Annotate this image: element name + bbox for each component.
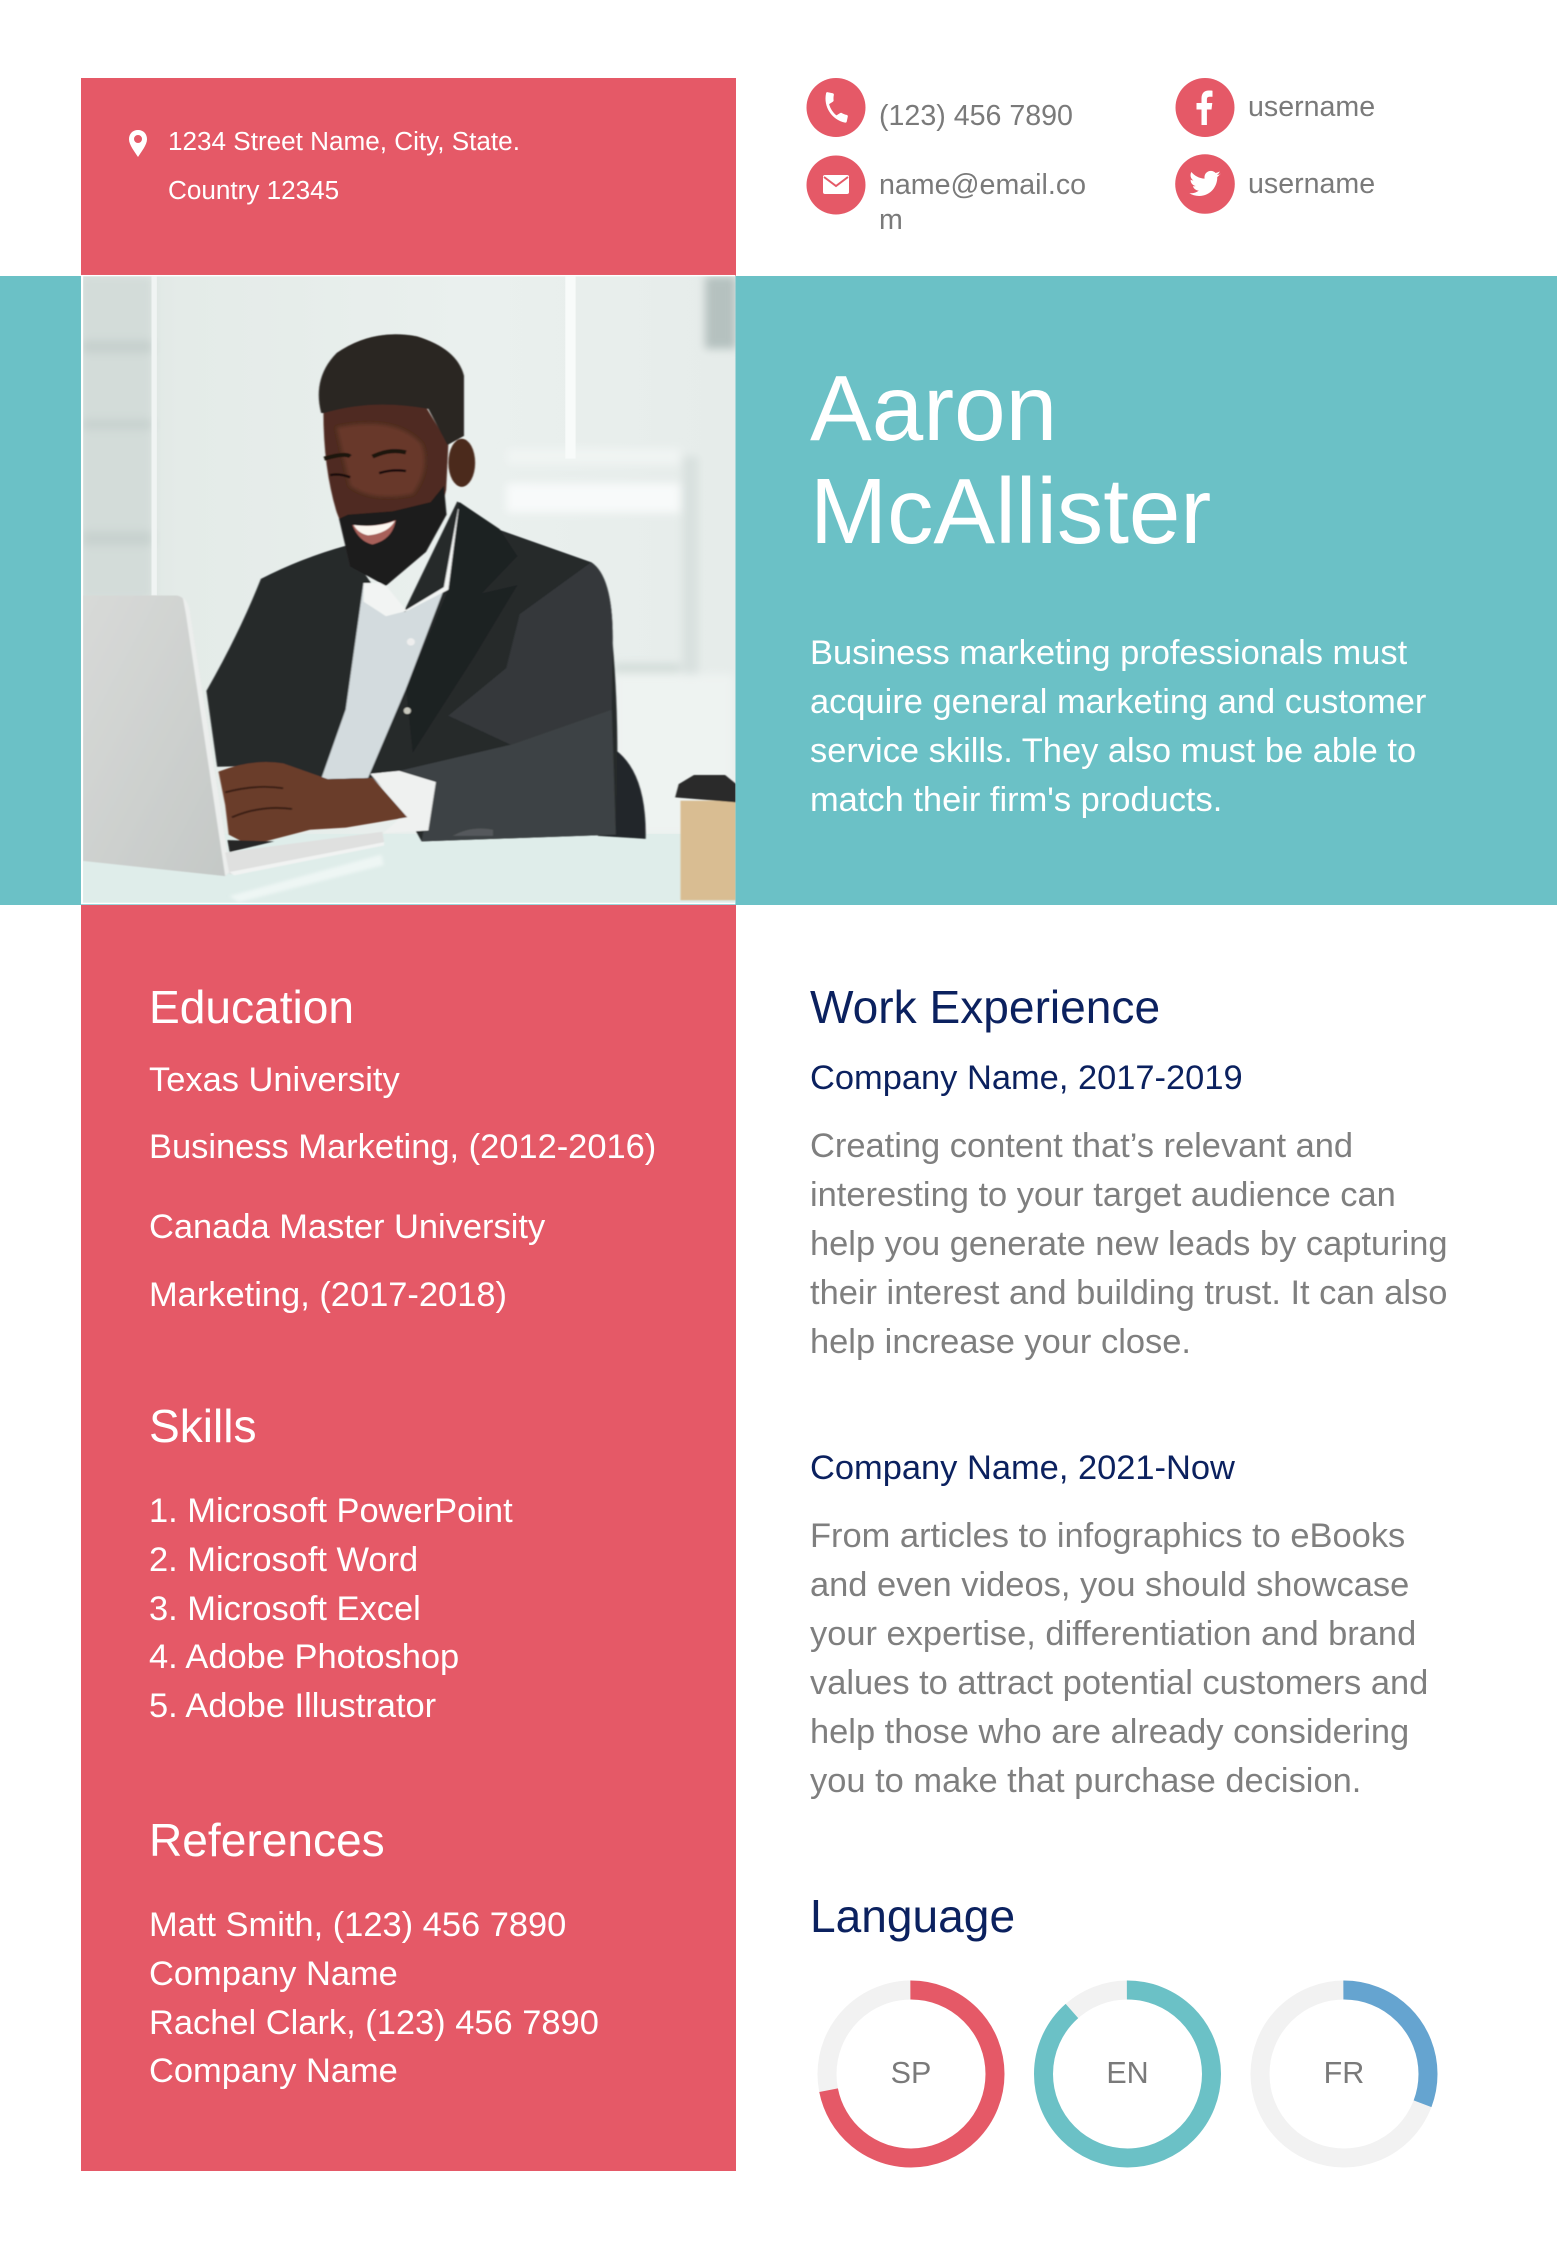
summary text: Business marketing professionals must (810, 634, 1407, 672)
heading: skills: Skills (149, 1400, 257, 1452)
hair (319, 334, 464, 445)
laptop base (225, 832, 384, 874)
mouth (352, 520, 396, 544)
donut: EN: EN (1106, 2056, 1149, 2090)
job description 2: and even videos, you should showcase (810, 1566, 1409, 1604)
heading: language: Language (810, 1890, 1015, 1942)
references list: Matt Smith, (123) 456 7890 (149, 1906, 566, 1944)
hand (218, 762, 407, 845)
address text: Country 12345 (168, 175, 339, 205)
education entries: Canada Master University (149, 1208, 545, 1246)
icon: facebook (1176, 78, 1234, 137)
heading: education: Education (149, 980, 354, 1032)
panel: teal hero band (0, 276, 1557, 905)
summary text (810, 634, 1426, 818)
beard (339, 486, 447, 586)
table (84, 834, 680, 902)
skills list: 1. Microsoft PowerPoint (149, 1492, 513, 1530)
shirt (321, 583, 445, 779)
panel: work experience (810, 980, 1448, 1800)
job description 1: Creating content that’s relevant and (810, 1127, 1353, 1165)
address text: 1234 Street Name, City, State. (168, 126, 520, 156)
cuff (370, 771, 436, 833)
job description 1: help you generate new leads by capturing (810, 1225, 1448, 1263)
name: McAllister (810, 459, 1211, 563)
window bar (565, 276, 576, 459)
name (810, 356, 1211, 563)
education entries (149, 1061, 656, 1314)
panel: left column (81, 905, 736, 2171)
panel: name and summary (810, 356, 1426, 818)
ear (448, 439, 475, 487)
section: references (149, 1814, 599, 2090)
skills list: 2. Microsoft Word (149, 1541, 418, 1579)
references list: Company Name (149, 1955, 398, 1993)
contact: email: m (879, 204, 903, 236)
icon: phone (806, 78, 866, 137)
education entries: Marketing, (2017-2018) (149, 1276, 507, 1314)
job description 1: help increase your close. (810, 1323, 1191, 1361)
photo: man working on laptop (81, 275, 736, 904)
sleeve highlight (393, 709, 616, 841)
panel: address header (81, 78, 736, 276)
donut: SP (827, 1990, 995, 2158)
icon: twitter (1175, 154, 1235, 214)
contact: email (806, 156, 1086, 236)
section: skills (149, 1400, 513, 1725)
job description 2: help those who are already considering (810, 1713, 1409, 1751)
job description 2 (810, 1517, 1428, 1800)
job description 2: you to make that purchase decision. (810, 1762, 1361, 1800)
contact: facebook (1176, 78, 1375, 137)
jacket (206, 501, 617, 841)
job description 2: values to attract potential customers and (810, 1664, 1428, 1702)
cup (680, 801, 736, 900)
job title 1: Company Name, 2017-2019 (810, 1059, 1243, 1097)
collar (364, 508, 464, 616)
job description 1: interesting to your target audience can (810, 1176, 1396, 1214)
skills list (149, 1492, 513, 1725)
laptop lid (81, 595, 231, 876)
contact: email: name@email.co (879, 169, 1086, 201)
buttons (407, 638, 415, 646)
contact: phone (806, 78, 1073, 137)
address text (168, 126, 520, 205)
icon: location pin (129, 130, 147, 157)
job description 2: From articles to infographics to eBooks (810, 1517, 1405, 1555)
summary text: service skills. They also must be able to (810, 732, 1416, 770)
contact: facebook: username (1248, 91, 1375, 123)
name: Aaron (810, 356, 1057, 460)
job description 1: their interest and building trust. It can also (810, 1274, 1447, 1312)
job title 2: Company Name, 2021-Now (810, 1449, 1235, 1487)
donut: FR (1260, 1990, 1428, 2158)
heading: references: References (149, 1814, 385, 1866)
contact: phone: (123) 456 7890 (879, 100, 1073, 132)
contact: twitter (1175, 154, 1375, 214)
heading: work experience: Work Experience (810, 980, 1160, 1032)
summary text: match their firm's products. (810, 780, 1222, 818)
panel: contact details (806, 78, 1375, 236)
lapel (406, 502, 518, 753)
icon: mail (806, 156, 866, 214)
donut: FR: FR (1324, 2056, 1364, 2090)
skills list: 5. Adobe Illustrator (149, 1687, 436, 1725)
education entries: Texas University (149, 1061, 400, 1099)
job description 1 (810, 1127, 1448, 1361)
donut: SP: SP (891, 2056, 931, 2090)
education entries: Business Marketing, (2012-2016) (149, 1128, 656, 1166)
skills list: 3. Microsoft Excel (149, 1590, 421, 1628)
donut: EN (1044, 1990, 1212, 2158)
job description 2: your expertise, differentiation and brand (810, 1615, 1416, 1653)
chair (598, 750, 646, 839)
chart: language donuts (818, 1980, 1438, 2168)
section: education (149, 980, 656, 1314)
references list: Company Name (149, 2052, 398, 2090)
references list (149, 1906, 599, 2090)
brows eyes (324, 451, 406, 459)
skills list: 4. Adobe Photoshop (149, 1638, 459, 1676)
references list: Rachel Clark, (123) 456 7890 (149, 2004, 599, 2042)
summary text: acquire general marketing and customer (810, 682, 1426, 720)
contact: twitter: username (1248, 168, 1375, 200)
face (322, 404, 450, 520)
